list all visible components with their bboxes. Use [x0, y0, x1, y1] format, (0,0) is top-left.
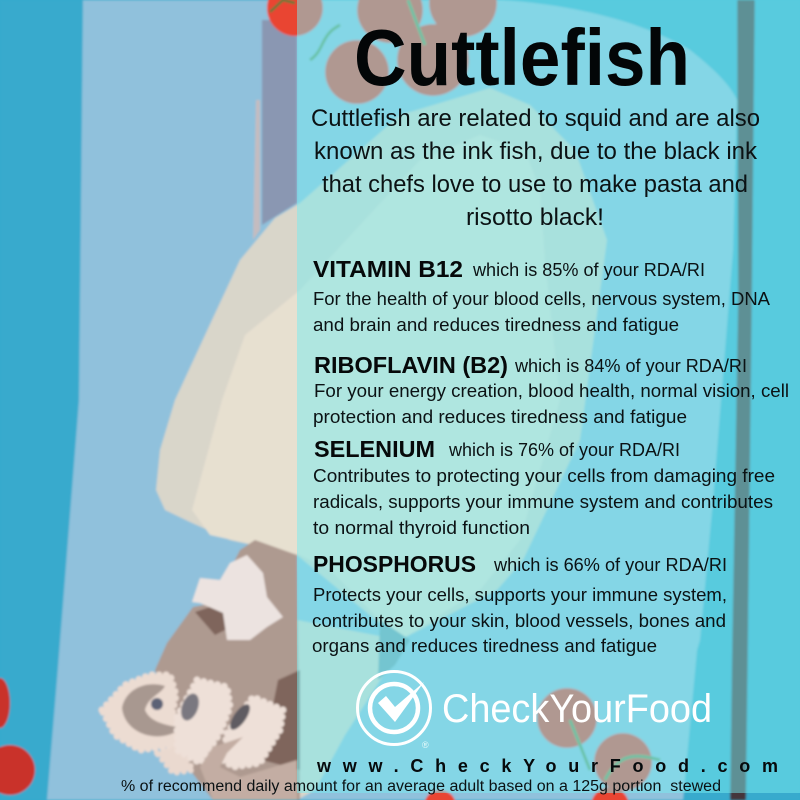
phosphorus block: PHOSPHORUS	[313, 551, 476, 577]
selenium block: radicals, supports your immune system and contributes	[313, 492, 773, 512]
vitamin B12 block: VITAMIN B12	[313, 256, 463, 282]
selenium block: Contributes to protecting your cells from damaging free	[313, 466, 775, 486]
left tomatoes	[0, 678, 10, 728]
vitamin B12 block	[313, 256, 770, 335]
intro text: known as the ink fish, due to the black ink	[314, 138, 758, 165]
dark stripe on paper	[262, 20, 297, 225]
selenium block	[313, 436, 775, 538]
selenium block: to normal thyroid function	[313, 518, 530, 538]
shadow under mantle	[378, 620, 410, 680]
vitamin B12 block: and brain and reduces tiredness and fatigue	[313, 315, 679, 335]
intro text	[311, 105, 760, 231]
squid mantle back	[156, 88, 607, 800]
selenium block: which is 76% of your RDA/RI	[448, 440, 680, 460]
tentacle lobe	[157, 743, 193, 773]
icon: check mark in circles	[358, 672, 430, 744]
tomatoes behind panel	[267, 0, 652, 800]
tomato stems	[310, 0, 660, 780]
squid mantle front	[192, 135, 560, 640]
phosphorus block: which is 66% of your RDA/RI	[493, 555, 727, 575]
riboflavin block: which is 84% of your RDA/RI	[514, 356, 747, 376]
squid head	[155, 540, 300, 800]
phosphorus block: Protects your cells, supports your immune system,	[313, 585, 727, 605]
riboflavin block	[313, 352, 789, 427]
right curl	[226, 701, 254, 733]
squid tentacle tops	[192, 555, 283, 640]
title: Cuttlefish	[354, 13, 690, 102]
grey stripe	[730, 0, 755, 800]
website: www.CheckYourFood.com	[316, 756, 778, 776]
footnote: % of recommend daily amount for an average adult based on a 125g portion stewed	[121, 778, 721, 795]
translucent panel	[297, 0, 800, 793]
riboflavin block: For your energy creation, blood health, normal vision, cell	[314, 381, 789, 401]
tentacle right	[223, 697, 283, 767]
tentacle middle	[177, 680, 230, 763]
lower curl	[200, 737, 297, 800]
logo	[358, 672, 712, 750]
head shading	[195, 602, 300, 770]
vitamin B12 block: For the health of your blood cells, nervous system, DNA	[313, 289, 770, 309]
logo wordmark: CheckYourFood	[442, 687, 712, 731]
riboflavin block: protection and reduces tiredness and fatigue	[313, 407, 687, 427]
phosphorus block	[312, 551, 727, 656]
selenium block: SELENIUM	[314, 436, 435, 462]
tentacle left inner curl	[122, 684, 182, 736]
phosphorus block: contributes to your skin, blood vessels, bones and	[312, 611, 726, 631]
vitamin B12 block: which is 85% of your RDA/RI	[472, 260, 705, 280]
intro text: risotto black!	[466, 204, 604, 231]
registered mark: ®	[422, 740, 429, 750]
middle curl	[178, 691, 202, 723]
phosphorus block: organs and reduces tiredness and fatigue	[312, 636, 657, 656]
sucker eye	[151, 698, 163, 710]
intro text: Cuttlefish are related to squid and are also	[311, 105, 760, 132]
intro text: that chefs love to use to make pasta and	[322, 171, 748, 198]
riboflavin block: RIBOFLAVIN (B2)	[314, 352, 508, 378]
tentacle left	[102, 675, 180, 750]
